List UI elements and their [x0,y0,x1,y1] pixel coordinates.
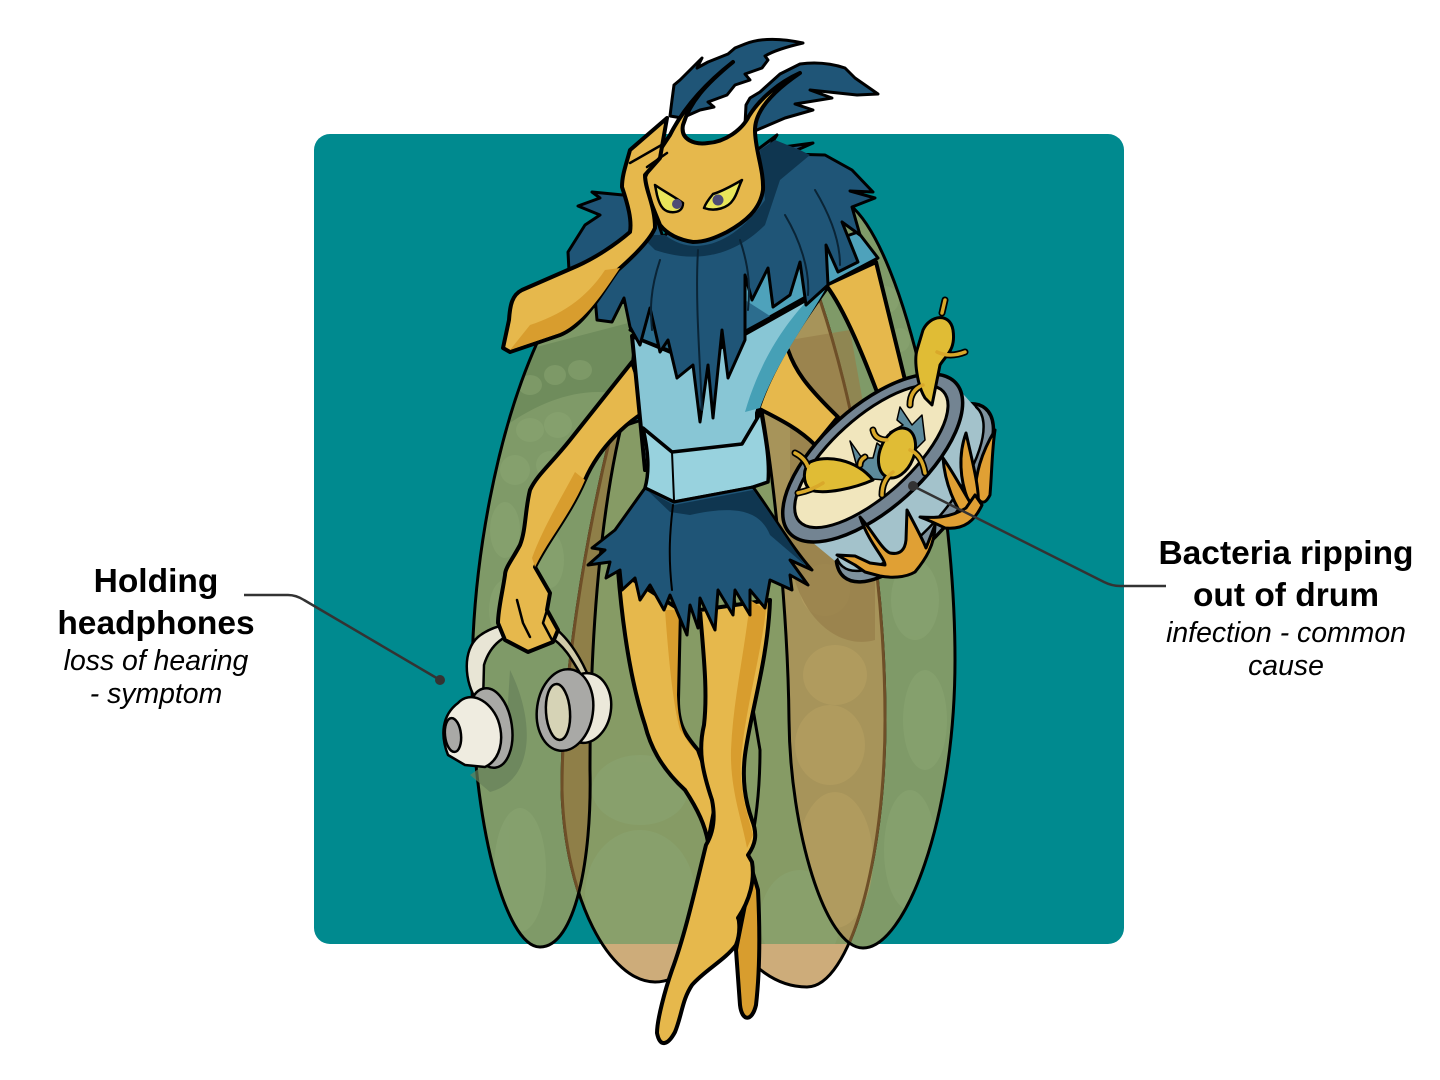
arm shading [510,268,620,350]
drum shell fill [795,384,989,565]
skirt shade [648,490,805,565]
feather: left antenna [670,39,803,118]
hand gripping drum [837,430,995,577]
tan part of wings below panel [604,944,847,986]
leg shading [731,600,766,848]
left ear cup [443,685,517,771]
forearm to drum [750,348,838,445]
finger lines [517,600,552,640]
bacterium: top [910,300,965,405]
shoulder panel [630,232,878,360]
bacterium: left [795,453,873,493]
wing cell texture [510,324,632,423]
headphones [443,623,616,792]
label: bacteria ripping out of drum: cause [1248,650,1324,682]
character [498,39,905,1043]
skirt [588,487,812,635]
torn skin [773,363,970,550]
tear in drum skin [850,407,925,480]
headphone shadow [470,670,527,792]
collar feathers [568,135,875,422]
overlap right [764,302,884,940]
label: bacteria ripping out of drum [1158,535,1414,682]
label: bacteria ripping out of drum: infection - common [1166,617,1406,649]
front leg and foot [657,600,770,1043]
wings [472,205,955,987]
eyes [655,180,742,212]
torso shadow [745,290,825,412]
label: bacteria ripping out of drum: Bacteria ripping [1158,535,1414,572]
raised arm and hand [503,118,667,352]
bottom hoop [810,380,1020,606]
label: holding headphones: loss of hearing [64,645,248,677]
back leg and foot [618,570,716,842]
label: holding headphones: headphones [57,605,255,642]
leader line: headphones [244,595,445,685]
feather: right antenna [745,63,878,130]
label: holding headphones: Holding [94,563,218,600]
back leg shading [665,610,695,750]
collar strand lines [651,190,840,410]
bacteria [795,300,965,495]
head [645,62,800,242]
headband [467,623,526,703]
belt [643,412,768,502]
bacterium: middle [871,423,925,495]
rim [755,345,990,571]
near arm shading [532,472,585,567]
near arm and holding hand [498,362,648,652]
right ear cup [532,666,616,754]
shoulder shade [636,300,770,358]
panel: teal background square [314,134,1124,944]
belt centre line [672,452,674,500]
torso [632,288,827,470]
back toe [736,870,759,1018]
drum [755,338,1040,618]
label: holding headphones [57,563,255,710]
hand finger lines [630,143,667,167]
collar shade [640,140,810,257]
label: bacteria ripping out of drum: out of drum [1193,577,1379,614]
drum shell lower edge [810,380,1008,593]
label: holding headphones: - symptom [90,678,222,710]
leader line: drum [908,481,1166,586]
back arm [826,262,905,400]
overlap left [564,436,618,887]
skirt centre fold [670,505,673,590]
